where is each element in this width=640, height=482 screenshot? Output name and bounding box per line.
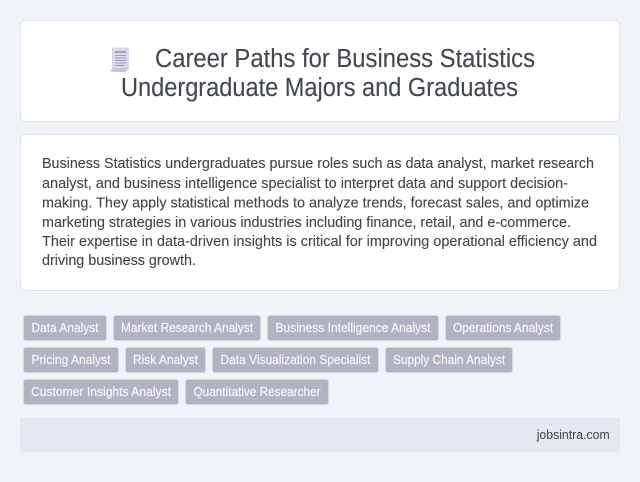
tag: Business Intelligence Analyst: Business Intelligence Analyst	[276, 321, 431, 335]
description text: Business Statistics undergraduates pursue roles such as data analyst, market research	[42, 156, 594, 172]
description panel	[20, 134, 620, 290]
tag: Quantitative Researcher: Quantitative Researcher	[194, 385, 320, 399]
description text: marketing strategies in various industries including finance, retail, and e-commerce.	[42, 215, 571, 231]
description text: analyst, and business intelligence specialist to interpret data and support decision-	[42, 176, 568, 192]
tag: Market Research Analyst	[114, 316, 260, 340]
title: Undergraduate Majors and Graduates	[121, 74, 518, 102]
tag: Customer Insights Analyst: Customer Insights Analyst	[31, 385, 172, 399]
header panel	[20, 20, 620, 122]
tag: Data Visualization Specialist	[212, 348, 378, 372]
footer site name: jobsintra.com	[536, 428, 610, 442]
tag: Risk Analyst	[126, 348, 206, 372]
description text: making. They apply statistical methods to analyze trends, forecast sales, and optimize	[42, 196, 589, 212]
description text: driving business growth.	[42, 253, 196, 269]
tag: Operations Analyst	[446, 316, 560, 340]
tag: Business Intelligence Analyst	[268, 316, 438, 340]
career tags	[24, 316, 560, 404]
footer bar	[20, 418, 620, 452]
tag: Risk Analyst: Risk Analyst	[133, 353, 198, 367]
tag: Pricing Analyst	[24, 348, 118, 372]
tag: Data Visualization Specialist: Data Visualization Specialist	[220, 353, 371, 367]
tag: Data Analyst	[24, 316, 106, 340]
description text: Their expertise in data-driven insights is critical for improving operational efficiency and	[42, 234, 597, 250]
tag: Market Research Analyst: Market Research Analyst	[121, 321, 253, 335]
tag: Customer Insights Analyst	[24, 380, 178, 404]
tag: Quantitative Researcher	[186, 380, 328, 404]
tag: Pricing Analyst: Pricing Analyst	[32, 353, 111, 367]
icon: document	[110, 47, 129, 72]
description text	[42, 156, 597, 269]
tag: Data Analyst: Data Analyst	[32, 321, 99, 335]
tag: Supply Chain Analyst: Supply Chain Analyst	[393, 353, 505, 367]
tag: Supply Chain Analyst	[386, 348, 512, 372]
title	[121, 45, 535, 102]
title: Career Paths for Business Statistics	[155, 45, 535, 73]
tag: Operations Analyst: Operations Analyst	[453, 321, 554, 335]
